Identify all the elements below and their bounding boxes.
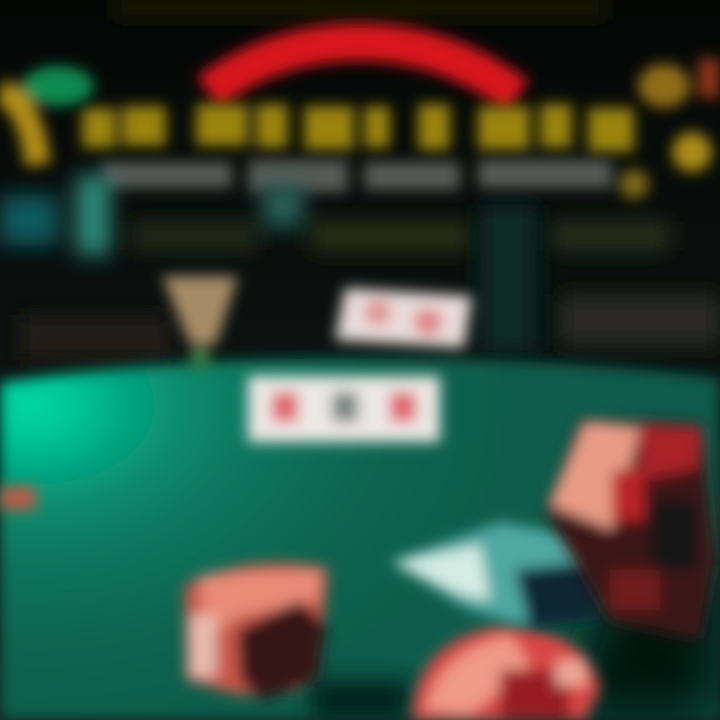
- teal card fan: [390, 522, 600, 628]
- sign title: gold lettering: [82, 104, 634, 152]
- sign subtitle: grey lettering: [102, 160, 649, 199]
- left teal decor: [0, 175, 304, 255]
- card: lower: [248, 376, 440, 442]
- chip: left edge: [0, 486, 36, 510]
- right ornament: gold and red: [638, 58, 720, 172]
- card: upper: [335, 288, 472, 348]
- tan figure: [162, 276, 238, 368]
- chip stack: right: [545, 418, 716, 640]
- sign arch: red: [208, 42, 518, 96]
- chip stack: centre: [185, 563, 328, 700]
- poker table felt: [0, 358, 720, 720]
- chip stack: bottom: [412, 626, 600, 720]
- left ornament: gold and green: [0, 66, 94, 165]
